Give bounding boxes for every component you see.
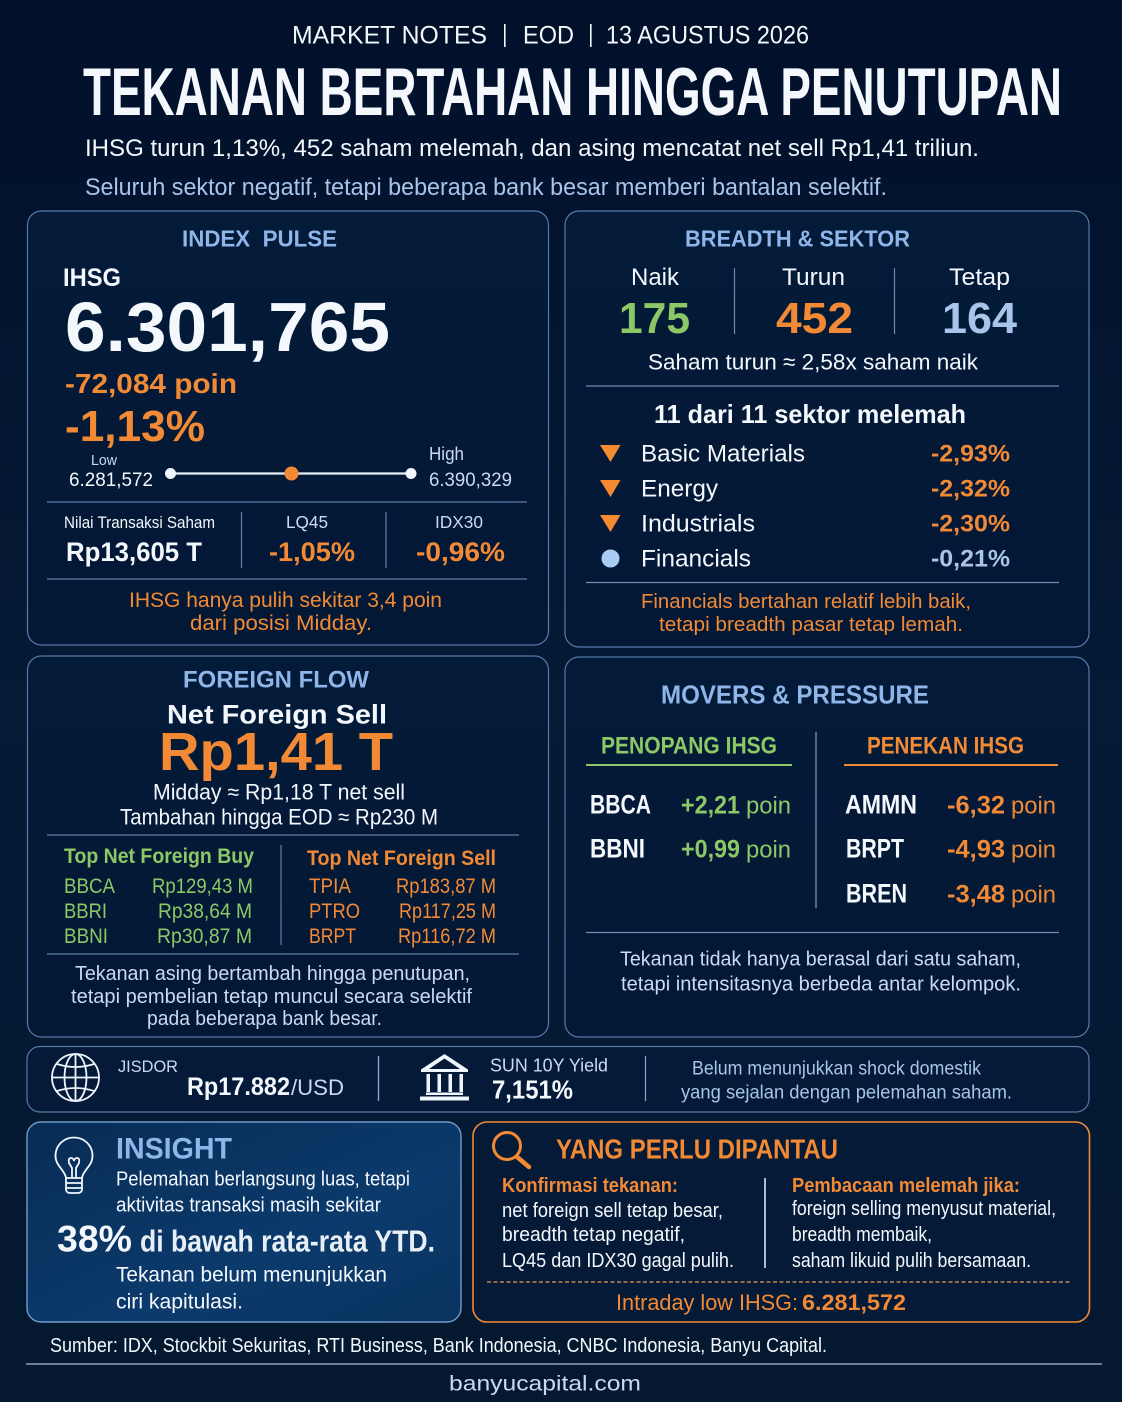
column: penopang: poin <box>746 792 791 820</box>
table: top net foreign buy <box>64 845 254 948</box>
IHSG value block: -1,13% <box>65 402 205 451</box>
heading: foreign flow: FOREIGN FLOW <box>183 666 369 694</box>
stat: tetap: 164 <box>942 294 1018 343</box>
strip note: yang sejalan dengan pelemahan saham. <box>681 1082 1012 1104</box>
icon: bank building <box>420 1054 469 1100</box>
sector: industrials <box>600 510 1010 538</box>
net foreign sell: Rp1,41 T <box>159 722 393 782</box>
table: top net foreign buy: Rp129,43 M <box>152 875 253 898</box>
strip note: Belum menunjukkan shock domestik <box>692 1058 981 1080</box>
column: penopang <box>586 732 792 864</box>
net foreign sell: Midday ≈ Rp1,18 T net sell <box>153 780 405 804</box>
sector: energy <box>600 476 1010 502</box>
strip note <box>681 1058 1012 1104</box>
stat: naik: 175 <box>619 294 690 343</box>
stat: tetap: Tetap <box>949 264 1010 291</box>
column: penekan: PENEKAN IHSG <box>867 732 1024 760</box>
net foreign sell: Net Foreign Sell <box>167 700 387 730</box>
sector heading: 11 dari 11 sektor melemah <box>654 399 966 429</box>
table: top net foreign sell: Top Net Foreign Sell <box>307 847 496 870</box>
intraday low: Intraday low IHSG: <box>616 1290 798 1315</box>
low-high range: 6.281,572 <box>69 470 153 491</box>
sector: basic materials: -2,93% <box>931 440 1010 468</box>
column: pembacaan melemah: breadth membaik, <box>792 1224 932 1246</box>
note: tetapi breadth pasar tetap lemah. <box>659 614 963 636</box>
sector: energy: Energy <box>641 476 718 502</box>
table: top net foreign sell <box>307 847 496 948</box>
column: konfirmasi tekanan <box>502 1174 734 1272</box>
low-high range: Low <box>91 453 118 469</box>
low-high range: High <box>429 444 464 464</box>
source line: Sumber: IDX, Stockbit Sekuritas, RTI Business, Bank Indonesia, CNBC Indonesia, Banyu Capital. <box>50 1335 827 1357</box>
note: Tekanan asing bertambah hingga penutupan, <box>75 963 470 985</box>
column: penekan: BRPT <box>846 834 904 864</box>
column: konfirmasi tekanan: breadth tetap negatif, <box>502 1224 685 1246</box>
column: penekan: poin <box>1011 792 1056 820</box>
table: top net foreign sell: Rp117,25 M <box>399 900 496 923</box>
table: top net foreign buy: BBCA <box>64 875 115 898</box>
column: penekan: -3,48 <box>947 880 1005 908</box>
note <box>620 948 1021 996</box>
sector: energy: -2,32% <box>931 476 1010 502</box>
stat: turun: Turun <box>782 264 845 291</box>
note: Financials bertahan relatif lebih baik, <box>641 591 971 613</box>
metric: transaction value <box>64 513 215 567</box>
metric: IDX30: IDX30 <box>435 512 483 532</box>
JISDOR: Rp17.882 <box>187 1073 290 1101</box>
sector: basic materials <box>600 440 1010 468</box>
table: top net foreign sell: BRPT <box>309 925 356 948</box>
net foreign sell <box>120 700 438 830</box>
insight text: di bawah rata-rata YTD. <box>140 1224 435 1258</box>
note: pada beberapa bank besar. <box>147 1008 382 1030</box>
JISDOR: JISDOR <box>118 1057 178 1076</box>
insight text <box>57 1168 435 1314</box>
subtitle <box>85 135 979 201</box>
SUN yield <box>490 1056 608 1104</box>
JISDOR: /USD <box>291 1075 344 1100</box>
note <box>641 591 971 636</box>
SUN yield: 7,151% <box>492 1074 573 1104</box>
note <box>129 589 442 635</box>
heading: watch: YANG PERLU DIPANTAU <box>556 1134 838 1164</box>
table: top net foreign sell: TPIA <box>309 875 351 898</box>
header line <box>292 22 809 50</box>
breadth ratio: Saham turun ≈ 2,58x saham naik <box>648 350 979 374</box>
metric: LQ45: LQ45 <box>286 512 328 532</box>
table: top net foreign buy: Rp38,64 M <box>158 900 252 923</box>
column: penekan: poin <box>1011 882 1056 908</box>
insight text: aktivitas transaksi masih sekitar <box>116 1194 381 1216</box>
sector: industrials: -2,30% <box>931 510 1010 538</box>
column: pembacaan melemah: Pembacaan melemah jika: <box>792 1174 1020 1197</box>
column: pembacaan melemah <box>792 1174 1056 1272</box>
sector: financials: Financials <box>641 546 751 572</box>
header line: 13 AGUSTUS 2026 <box>606 22 809 50</box>
insight text: ciri kapitulasi. <box>116 1290 243 1314</box>
column: penekan: AMMN <box>845 790 917 820</box>
panel: index pulse <box>28 211 548 645</box>
sector: basic materials: Basic Materials <box>641 440 805 468</box>
icon: globe <box>52 1054 99 1101</box>
table: top net foreign buy: Rp30,87 M <box>157 925 252 948</box>
stat: tetap <box>942 264 1018 343</box>
stat: naik <box>619 264 690 343</box>
header line: MARKET NOTES <box>292 22 487 50</box>
JISDOR <box>118 1057 344 1101</box>
header line: EOD <box>523 22 574 50</box>
panel: yang perlu dipantau <box>473 1122 1090 1322</box>
IHSG value block: -72,084 poin <box>65 368 237 399</box>
panel: breadth and sector <box>565 211 1089 647</box>
IHSG value block: 6.301,765 <box>65 288 390 366</box>
table: top net foreign sell: Rp183,87 M <box>396 875 496 898</box>
panel: foreign flow <box>28 656 548 1037</box>
column: penekan: -6,32 <box>947 792 1005 820</box>
metric: IDX30 <box>416 512 505 567</box>
column: konfirmasi tekanan: LQ45 dan IDX30 gagal pulih. <box>502 1250 734 1272</box>
column: penopang: BBCA <box>590 790 651 820</box>
metric: LQ45: -1,05% <box>269 537 355 567</box>
table: top net foreign buy: BBNI <box>64 925 108 948</box>
IHSG value block: IHSG <box>63 264 121 292</box>
metric: LQ45 <box>269 512 355 567</box>
column: penopang: PENOPANG IHSG <box>601 732 777 760</box>
note: IHSG hanya pulih sekitar 3,4 poin <box>129 589 442 612</box>
stat: naik: Naik <box>631 264 680 291</box>
intraday low <box>616 1290 906 1315</box>
net foreign sell: Tambahan hingga EOD ≈ Rp230 M <box>120 804 438 830</box>
column: konfirmasi tekanan: Konfirmasi tekanan: <box>502 1174 678 1197</box>
column: penekan: poin <box>1011 836 1056 864</box>
column: penopang: BBNI <box>590 834 645 864</box>
table: top net foreign sell: PTRO <box>309 900 360 923</box>
note <box>71 963 472 1030</box>
metric: IDX30: -0,96% <box>416 537 505 567</box>
sector: industrials: Industrials <box>641 510 755 538</box>
low-high range <box>69 444 512 491</box>
panel: macro strip <box>27 1046 1089 1112</box>
heading: breadth: BREADTH & SEKTOR <box>685 226 910 252</box>
sector: financials <box>602 546 1010 572</box>
heading: movers: MOVERS & PRESSURE <box>661 680 929 710</box>
subtitle: Seluruh sektor negatif, tetapi beberapa bank besar memberi bantalan selektif. <box>85 174 887 201</box>
stat: turun: 452 <box>776 294 853 343</box>
table: top net foreign buy: Top Net Foreign Buy <box>64 845 254 868</box>
note: tetapi pembelian tetap muncul secara selektif <box>71 986 472 1008</box>
column: pembacaan melemah: saham likuid pulih bersamaan. <box>792 1250 1031 1272</box>
column: penekan <box>844 732 1058 908</box>
icon: light bulb <box>56 1138 92 1193</box>
note: dari posisi Midday. <box>190 612 372 635</box>
subtitle: IHSG turun 1,13%, 452 saham melemah, dan asing mencatat net sell Rp1,41 triliun. <box>85 135 979 162</box>
column: pembacaan melemah: foreign selling menyusut material, <box>792 1198 1056 1220</box>
insight text: 38% <box>57 1218 132 1260</box>
SUN yield: SUN 10Y Yield <box>490 1056 608 1076</box>
metric: transaction value: Nilai Transaksi Saham <box>64 513 215 532</box>
note: Tekanan tidak hanya berasal dari satu saham, <box>620 948 1021 970</box>
footer website: banyucapital.com <box>449 1372 641 1396</box>
column: penekan: BREN <box>846 878 907 908</box>
column: penekan: -4,93 <box>947 836 1005 864</box>
column: konfirmasi tekanan: net foreign sell tetap besar, <box>502 1200 723 1222</box>
panel: movers and pressure <box>565 657 1089 1037</box>
metric: transaction value: Rp13,605 T <box>66 537 202 567</box>
insight text: Pelemahan berlangsung luas, tetapi <box>116 1168 410 1190</box>
heading: insight: INSIGHT <box>116 1132 232 1166</box>
low-high range: 6.390,329 <box>429 469 512 491</box>
sector: financials: -0,21% <box>931 546 1010 572</box>
panel: insight <box>27 1122 461 1322</box>
stat: turun <box>776 264 853 343</box>
intraday low: 6.281,572 <box>802 1290 906 1315</box>
column: penopang: +0,99 <box>681 836 740 864</box>
note: tetapi intensitasnya berbeda antar kelompok. <box>621 972 1021 996</box>
table: top net foreign buy: BBRI <box>64 900 107 923</box>
IHSG value block <box>63 264 390 451</box>
icon: magnifier <box>494 1132 529 1167</box>
column: penopang: +2,21 <box>681 792 740 820</box>
table: top net foreign sell: Rp116,72 M <box>398 925 496 948</box>
column: penopang: poin <box>746 836 791 864</box>
heading: index pulse: INDEX PULSE <box>182 226 337 252</box>
insight text: Tekanan belum menunjukkan <box>116 1264 387 1286</box>
